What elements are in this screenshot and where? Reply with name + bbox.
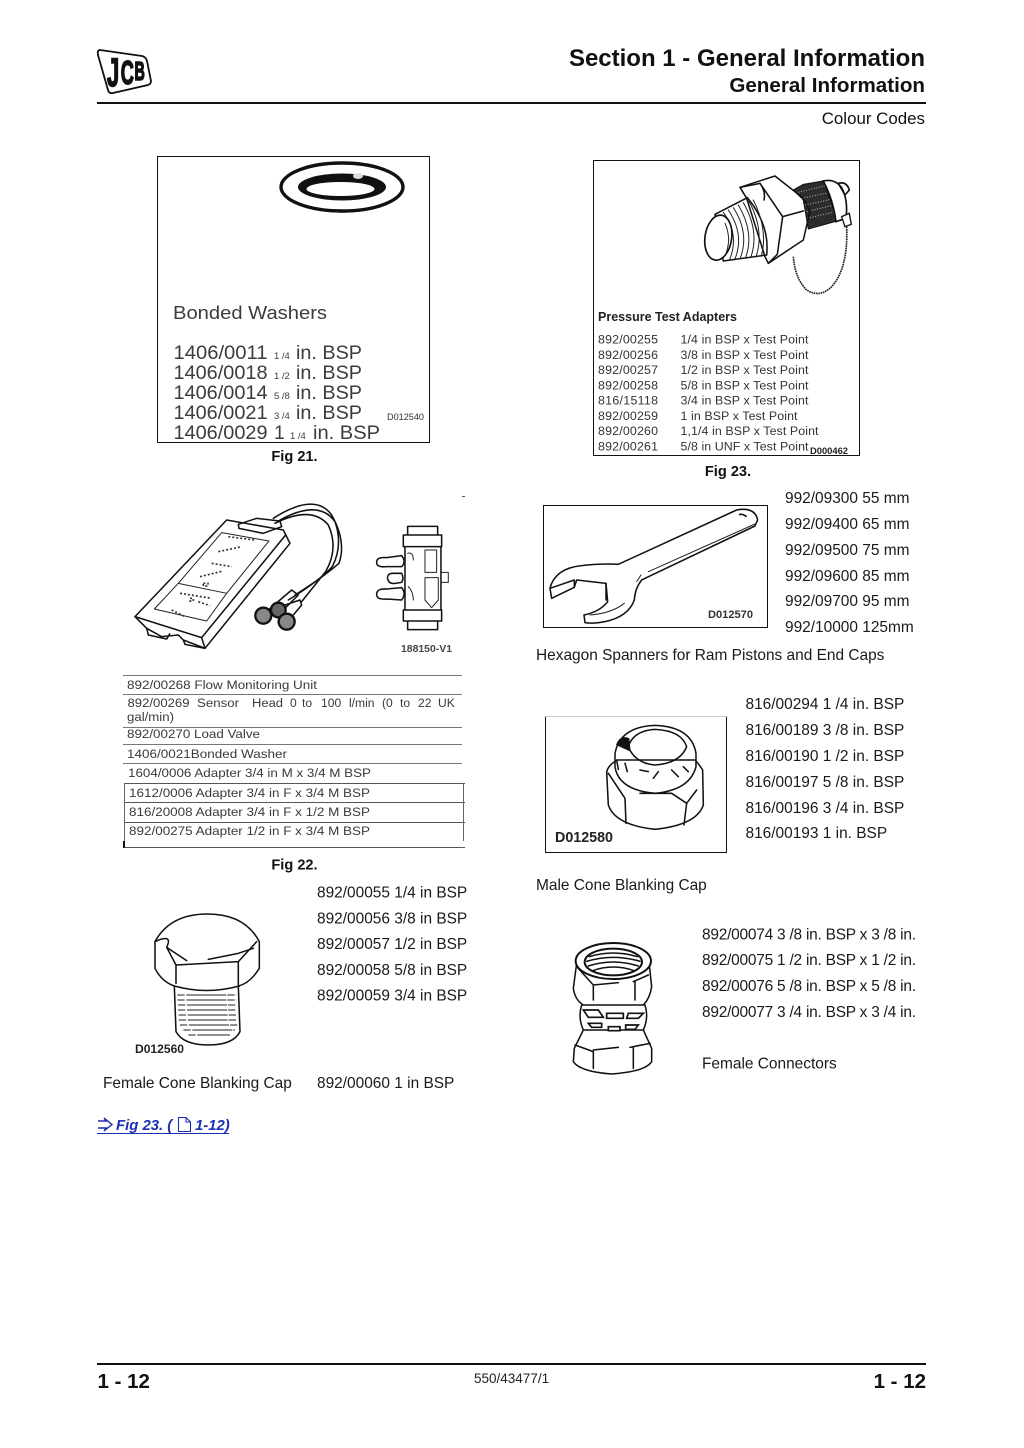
panel: bonded washers	[158, 156, 430, 444]
part list: 1406/0018	[174, 363, 268, 384]
footer	[97, 1363, 926, 1393]
part list: 816/00197 5 /8 in. BSP	[746, 774, 904, 791]
part list: 1406/0011	[174, 343, 268, 364]
icon: link arrow	[98, 1118, 112, 1131]
part list: 1 /2	[274, 371, 290, 382]
part list: in. BSP	[296, 343, 362, 364]
part list: 892/00257	[598, 363, 658, 377]
table: 892/00269	[128, 696, 190, 710]
part number: 188150-V1	[401, 644, 452, 655]
icon: flow monitor	[135, 504, 448, 648]
part list: 992/09300 55 mm	[785, 490, 909, 507]
part list: 892/00057 1/2 in BSP	[317, 936, 467, 953]
part list: 892/00076 5 /8 in. BSP x 5 /8 in.	[702, 978, 916, 995]
part list: 892/00077 3 /4 in. BSP x 3 /4 in.	[702, 1004, 916, 1021]
part list: 3 /4	[274, 411, 290, 422]
part list: 992/10000 125mm	[785, 619, 914, 636]
table: 892/00268 Flow Monitoring Unit	[127, 678, 318, 692]
part list: 892/00056 3/8 in BSP	[317, 910, 467, 928]
section name: Colour Codes	[822, 109, 925, 128]
icon: female connector	[573, 943, 652, 1074]
table: UK	[438, 696, 455, 710]
icon: page	[178, 1118, 190, 1132]
icon: blanking plug	[155, 914, 259, 1045]
table: l/min	[349, 696, 375, 710]
part list: 5/8 in UNF x Test Point	[680, 440, 809, 454]
part list: 1,1/4 in BSP x Test Point	[680, 424, 819, 438]
table: 816/20008 Adapter 3/4 in F x 1/2 M BSP	[129, 805, 370, 819]
part list: 892/00055 1/4 in BSP	[317, 884, 467, 902]
table	[123, 676, 465, 848]
icon: JCB logo	[98, 50, 151, 95]
panel: male cone blanking cap	[536, 696, 904, 894]
part list: 892/00261	[598, 440, 658, 454]
part list: in. BSP	[313, 423, 380, 444]
cap figure	[546, 716, 726, 852]
cross-reference link	[97, 1118, 230, 1134]
icon: pressure test adapter	[702, 176, 851, 293]
part list: 892/00260	[598, 424, 658, 438]
title: Section 1 - General Information	[569, 45, 925, 72]
part list	[598, 332, 819, 454]
part list: 892/00258	[598, 378, 658, 392]
panel: female cone blanking cap	[103, 884, 467, 1092]
part list: 1	[274, 423, 285, 444]
part list: 1/2 in BSP x Test Point	[680, 363, 809, 377]
part list: 992/09400 65 mm	[785, 516, 909, 533]
header rule	[97, 102, 926, 104]
panel: flow monitoring unit	[123, 496, 465, 848]
drawing code: D000462	[810, 445, 848, 456]
page number right: 1 - 12	[874, 1370, 926, 1393]
drawing code: D012560	[135, 1042, 184, 1056]
caption: Hexagon Spanners for Ram Pistons and End Caps	[536, 647, 885, 664]
part list: in. BSP	[296, 403, 362, 424]
part list: 816/00189 3 /8 in. BSP	[746, 722, 904, 739]
table: 1604/0006 Adapter 3/4 in M x 3/4 M BSP	[128, 766, 371, 780]
table: to	[400, 696, 410, 710]
part list: 892/00059 3/4 in BSP	[317, 988, 467, 1004]
part list: 5 /8	[274, 391, 290, 402]
caption: fig 23: Fig 23.	[705, 464, 751, 480]
table: 892/00270 Load Valve	[127, 727, 260, 741]
part list: 892/00074 3 /8 in. BSP x 3 /8 in.	[702, 926, 916, 944]
table: 1612/0006 Adapter 3/4 in F x 3/4 M BSP	[129, 786, 370, 800]
icon: JCB logo: B	[135, 58, 145, 86]
part list: 1406/0029	[174, 423, 268, 444]
table: (0	[382, 696, 393, 710]
part list: 892/00259	[598, 409, 658, 423]
header	[97, 45, 926, 128]
drawing code: D012580	[555, 830, 613, 846]
cross-reference link: 1-12)	[195, 1118, 230, 1134]
part list: 1406/0021	[174, 403, 268, 424]
part list: 816/00190 1 /2 in. BSP	[746, 748, 904, 765]
part list	[746, 696, 904, 842]
part list: 992/09600 85 mm	[785, 568, 909, 585]
icon: spanner	[550, 509, 758, 623]
part list	[702, 926, 916, 1021]
icon: blanking cap	[607, 725, 703, 829]
table: 22	[418, 696, 432, 710]
table: 100	[321, 696, 341, 710]
icon: JCB logo: C	[121, 54, 134, 91]
part list: 992/09500 75 mm	[785, 542, 909, 559]
part list: 1406/0014	[174, 383, 268, 404]
part list: 892/00256	[598, 348, 658, 362]
table: 892/00275 Adapter 1/2 in F x 3/4 M BSP	[129, 824, 370, 838]
table: 0	[290, 696, 297, 710]
table: Sensor	[197, 696, 239, 710]
part list: 892/00060 1 in BSP	[317, 1075, 454, 1092]
part list	[785, 490, 914, 636]
document number: 550/43477/1	[474, 1371, 549, 1386]
part list: 1 /4	[290, 431, 306, 442]
panel: hexagon spanners	[536, 490, 914, 664]
table: gal/min)	[127, 710, 174, 724]
drawing code: D012570	[708, 609, 753, 621]
part list: 892/00075 1 /2 in. BSP x 1 /2 in.	[702, 952, 916, 969]
page number left: 1 - 12	[98, 1370, 150, 1393]
spanner figure	[544, 506, 768, 628]
part list: 816/00294 1 /4 in. BSP	[746, 696, 904, 713]
icon: washer	[281, 163, 403, 212]
part list: 816/15118	[598, 394, 658, 408]
table: Head	[252, 696, 283, 710]
part list: 1/4 in BSP x Test Point	[680, 332, 809, 346]
part list: 992/09700 95 mm	[785, 593, 909, 610]
table: 1406/0021Bonded Washer	[127, 747, 287, 761]
part list: 3/4 in BSP x Test Point	[680, 394, 809, 408]
part list: 892/00058 5/8 in BSP	[317, 962, 467, 979]
cross-reference link: Fig 23. (	[116, 1118, 174, 1134]
caption: Male Cone Blanking Cap	[536, 877, 707, 894]
part list: 1 in BSP x Test Point	[680, 409, 798, 423]
part list: 1 /4	[274, 351, 290, 362]
caption: Female Connectors	[702, 1056, 837, 1072]
part list: 5/8 in BSP x Test Point	[680, 378, 809, 392]
icon: JCB logo: J	[107, 50, 119, 95]
caption: Female Cone Blanking Cap	[103, 1075, 292, 1092]
caption: fig 22: Fig 22.	[271, 858, 318, 874]
part list: in. BSP	[296, 363, 362, 384]
part list: in. BSP	[296, 383, 362, 404]
part list: 816/00193 1 in. BSP	[746, 825, 887, 842]
panel: female connectors	[573, 926, 916, 1074]
sensor head	[403, 526, 442, 630]
heading: Bonded Washers	[173, 303, 327, 323]
panel: pressure test adapters	[594, 160, 860, 456]
part list: 892/00255	[598, 332, 658, 346]
caption: fig 21: Fig 21.	[271, 449, 318, 465]
part list	[174, 343, 380, 444]
heading: Pressure Test Adapters	[598, 310, 737, 324]
part list: 816/00196 3 /4 in. BSP	[746, 800, 904, 817]
part list	[317, 884, 467, 1092]
subtitle: General Information	[729, 74, 925, 97]
drawing code: D012540	[387, 412, 424, 422]
table: to	[302, 696, 312, 710]
part list: 3/8 in BSP x Test Point	[680, 348, 809, 362]
